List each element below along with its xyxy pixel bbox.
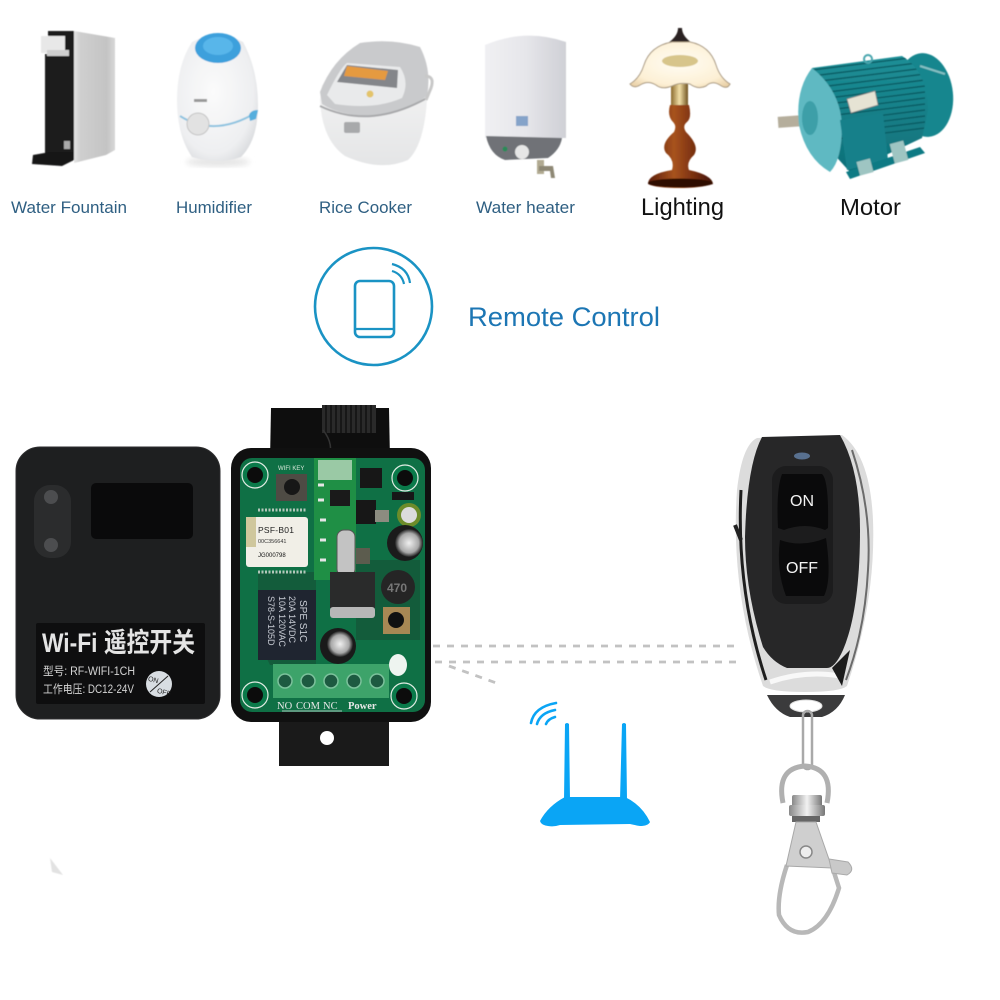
icon: table lamp [630, 28, 730, 188]
appliance: lighting [630, 28, 730, 221]
product: case cover [16, 447, 220, 719]
signal dashes to remote [433, 646, 736, 684]
keychain ring [803, 711, 812, 769]
snap clasp [779, 822, 852, 933]
terminal labels: COM [296, 701, 321, 712]
mounting slot [34, 485, 71, 558]
capacitors [320, 503, 423, 664]
inductor 470 [381, 570, 415, 604]
router antennas [564, 723, 627, 800]
top mounting tab [270, 408, 390, 460]
relay: 20A 14VDC [287, 596, 297, 644]
relay: 10A 120VAC [277, 596, 287, 647]
router body [540, 797, 650, 826]
wifi module: PSF-B01 [258, 525, 294, 535]
product label: OFF [156, 688, 171, 698]
icon: phone in circle [315, 248, 432, 365]
ON button [778, 474, 828, 530]
case body [16, 447, 220, 719]
heading: Remote Control: Remote Control [468, 302, 660, 332]
swivel D-ring [782, 766, 828, 803]
icon: humidifier [177, 33, 258, 167]
wifi router [531, 703, 650, 826]
ON button: ON [790, 493, 814, 510]
icon: water heater [485, 36, 566, 178]
product label: Wi-Fi 遥控开关 [42, 628, 195, 658]
remote control badge [315, 248, 660, 365]
relay: SPE S1C [297, 600, 308, 642]
wifi module: JG000798 [258, 553, 286, 559]
product label [36, 623, 205, 704]
label: Water Fountain: Water Fountain [11, 198, 127, 217]
appliance: motor [778, 50, 957, 220]
swivel barrel [789, 795, 825, 822]
regulator chip [330, 572, 375, 618]
appliance: water fountain [11, 31, 127, 217]
antenna coil [322, 405, 376, 460]
LED indicator [794, 452, 810, 460]
green circuit board [240, 458, 425, 712]
terminal labels: Power [348, 701, 377, 712]
lanyard tab [767, 695, 845, 717]
wifi module [246, 510, 308, 572]
reset button: WIFI KEY [278, 466, 304, 472]
label: Lighting: Lighting [641, 194, 724, 221]
enclosure [231, 448, 431, 722]
label: Humidifier: Humidifier [176, 198, 252, 217]
terminal block [273, 664, 389, 698]
terminal labels: NO [277, 701, 293, 712]
product label: 工作电压: DC12-24V [43, 683, 134, 696]
tactile switch [383, 607, 410, 634]
OFF button [779, 538, 829, 596]
LED [389, 654, 407, 676]
icon: water fountain [32, 31, 115, 166]
black face [745, 435, 860, 668]
relay: S78-S-105D [266, 596, 276, 646]
chrome shading [735, 450, 869, 686]
dark chips near RF board [356, 468, 414, 564]
product label: ON [147, 676, 159, 685]
terminal labels [277, 701, 377, 712]
key fob remote [735, 435, 873, 933]
icon: rice cooker [320, 41, 432, 165]
wifi waves [531, 703, 556, 724]
product: open relay board [231, 405, 431, 766]
appliance: rice cooker [319, 41, 432, 217]
product label: 型号: RF-WIFI-1CH [43, 664, 135, 678]
label: Motor: Motor [840, 194, 901, 220]
terminal labels: NC [323, 701, 338, 712]
inductor 470: 470 [387, 581, 407, 595]
wifi module: 00C356641 [258, 539, 286, 545]
RF daughter board [314, 458, 356, 580]
corner mounts [242, 462, 418, 709]
bottom mounting tab [279, 700, 389, 766]
button surround [772, 466, 833, 604]
icon: electric motor [778, 50, 957, 179]
appliance: humidifier [176, 33, 258, 217]
label: Water heater: Water heater [476, 198, 575, 217]
reset button [276, 466, 307, 501]
OFF button: OFF [786, 560, 818, 577]
chrome shell [736, 435, 873, 692]
relay [258, 590, 316, 660]
appliance: water heater [476, 36, 575, 217]
faint corner mark [50, 858, 63, 875]
display window [91, 483, 193, 539]
label: Rice Cooker: Rice Cooker [319, 198, 412, 217]
